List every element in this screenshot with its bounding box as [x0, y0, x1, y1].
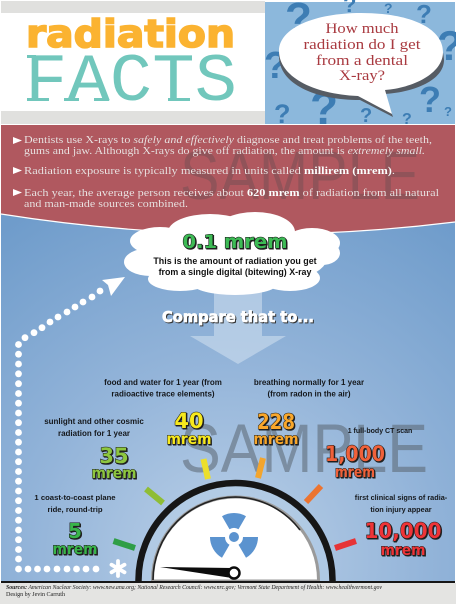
panel: red facts	[1, 125, 455, 234]
scattered question marks: ?	[402, 111, 412, 128]
label: CT scan: 1,000	[325, 442, 385, 466]
label: radiation injury	[355, 493, 448, 559]
label: sunlight: mrem	[92, 464, 136, 482]
credit: Design by Jevin Carruth	[6, 591, 66, 598]
label: radiation injury: mrem	[380, 541, 426, 559]
label: breathing: mrem	[254, 430, 298, 448]
bullet text: gums and jaw. Although X-rays do give off radiation, the amount is extremely small.	[24, 146, 425, 157]
label: breathing: 228	[257, 410, 295, 434]
panel: question bubble	[264, 0, 456, 134]
label: food and water: radioactive trace elements)	[111, 390, 215, 398]
label: CT scan	[325, 428, 412, 481]
cloud value: 0.1 mrem	[182, 232, 288, 253]
sources: Sources: American Nuclear Society: www.new.ana.org; National Research Council: www.nrc.gov; Vermont State Department of Health: www.healthvermont.gov	[6, 584, 382, 591]
heading: compare that to: Compare that to...	[162, 308, 314, 326]
dotted arrow	[15, 277, 125, 572]
label: breathing: (from radon in the air)	[267, 390, 351, 398]
header: title panel	[1, 1, 265, 124]
label: plane: mrem	[52, 540, 98, 558]
label: sunlight: radiation for 1 year	[58, 429, 130, 438]
label: breathing	[254, 378, 364, 448]
bubble question text: radiation do I get	[304, 37, 421, 53]
panel: blue background	[1, 212, 455, 582]
gauge ticks	[114, 458, 356, 548]
gauge	[114, 458, 356, 581]
bubble question text: X-ray?	[339, 68, 385, 84]
cloud caption: This is the amount of radiation you get	[153, 256, 317, 266]
bullet text: and man-made sources combined.	[24, 199, 188, 210]
label: breathing: breathing normally for 1 year	[254, 378, 364, 387]
label: food and water: mrem	[166, 430, 212, 448]
gauge needle	[160, 567, 232, 578]
icon: radiation trefoil	[207, 513, 261, 559]
bullet text: Radiation exposure is typically measured in units called millirem (mrem) .	[24, 166, 395, 177]
label: sunlight	[44, 417, 144, 482]
scattered question marks: ?	[310, 82, 338, 134]
icon: snowflake start marker	[112, 561, 124, 576]
bullet text: Dentists use X-rays to safely and effectively diagnose and treat problems of the teeth,	[24, 135, 432, 146]
label: food and water: 40	[174, 409, 204, 433]
label: radiation injury: tion injury appear	[370, 505, 432, 514]
label: radiation injury: 10,000	[364, 519, 442, 543]
cloud caption: from a single digital (bitewing) X-ray	[159, 267, 311, 277]
watermark: SAMPLE top: SAMPLE	[180, 137, 420, 214]
cloud	[124, 212, 340, 295]
label: plane: ride, round-trip	[47, 505, 103, 514]
bullet text: Each year, the average person receives about 620 mrem of radiation from all natural	[24, 188, 439, 199]
scattered question marks: ?	[264, 45, 287, 87]
label: plane	[34, 493, 116, 558]
footer	[0, 581, 456, 604]
speech bubble	[279, 13, 443, 114]
label: CT scan: mrem	[335, 463, 375, 481]
bullets	[13, 137, 22, 196]
title: FACTS: FACTS	[25, 44, 237, 121]
scattered question marks: ?	[274, 99, 290, 129]
scattered question marks: ?	[444, 104, 452, 119]
bubble question text	[304, 21, 421, 84]
arrow: down compare	[190, 285, 286, 364]
label: CT scan: 1 full-body CT scan	[348, 428, 412, 435]
bullet text	[24, 135, 439, 210]
label: food and water: food and water for 1 year (from	[104, 378, 222, 387]
label: plane: 1 coast-to-coast plane	[34, 493, 116, 502]
label: plane: 5	[68, 519, 82, 543]
speech bubble shadow	[279, 16, 444, 117]
scattered question marks: ?	[384, 0, 393, 16]
title: radiation: radiation	[26, 12, 235, 56]
scattered question marks: ?	[419, 79, 441, 120]
bubble question text: from a dental	[316, 53, 408, 69]
cloud caption	[153, 256, 317, 277]
scattered question marks	[264, 0, 456, 134]
watermark: SAMPLE bottom: SAMPLE	[180, 410, 428, 487]
label: sunlight: 35	[99, 444, 129, 468]
label: radiation injury: first clinical signs of radia-	[355, 493, 448, 502]
label: sunlight: sunlight and other cosmic	[44, 417, 144, 426]
label: food and water	[104, 378, 222, 448]
gauge hub	[228, 568, 240, 578]
scattered question marks: ?	[360, 105, 372, 127]
bubble question text: How much	[326, 21, 399, 37]
